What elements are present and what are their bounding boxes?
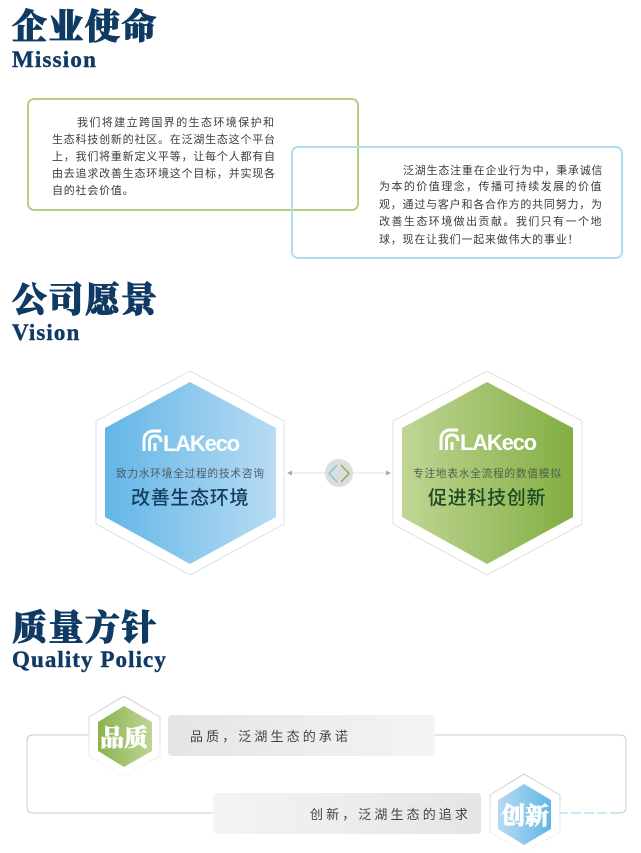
hexagon badge: 品质 (89, 696, 160, 776)
text block: mission: 上，我们将重新定义平等，让每个人都有自 (52, 151, 276, 163)
bar: quality statement (168, 715, 435, 756)
text block: mission (52, 116, 276, 197)
caption: numerical simulation: 专注地表水全流程的数值模拟 (413, 467, 562, 480)
icon: logo mark (441, 430, 458, 450)
title: 公司愿景: 公司愿景 (12, 281, 158, 320)
text block: commitment: 泛湖生态注重在企业行为中，秉承诚信 (403, 165, 603, 177)
panel: mission text green (27, 98, 359, 211)
text block: mission: 由去追求改善生态环境这个目标，并实现各 (52, 168, 276, 180)
text block: commitment: 观，通过与客户和各合作方的共同努力，为 (379, 199, 603, 211)
label: 改善生态环境: 改善生态环境 (131, 487, 249, 509)
panel: mission text blue (291, 146, 623, 259)
logo text: LAKeco: LAKeco (163, 431, 240, 456)
title: 质量方针: 质量方针 (12, 609, 158, 648)
label: 创新: 创新 (501, 802, 549, 830)
text: 创新 statement: 创新，泛湖生态的追求 (310, 807, 471, 822)
subtitle: Vision: Vision (12, 320, 80, 345)
logo text: LAKeco: LAKeco (460, 430, 537, 455)
subtitle: Mission: Mission (12, 47, 97, 72)
text block: mission: 自的社会价值。 (52, 185, 134, 197)
caption: technical consulting: 致力水环境全过程的技术咨询 (116, 467, 265, 480)
text block: mission: 生态科技创新的社区。在泛湖生态这个平台 (52, 134, 276, 146)
title: 企业使命: 企业使命 (12, 8, 158, 47)
text block: mission: 我们将建立跨国界的生态环境保护和 (77, 117, 275, 129)
subtitle: Quality Policy: Quality Policy (12, 647, 167, 672)
icon: center chevrons (325, 459, 353, 487)
label: 品质: 品质 (100, 724, 148, 752)
arrow: left connector (287, 470, 325, 476)
icon: logo mark (144, 431, 161, 451)
connector frame: quality loop (27, 735, 626, 813)
hexagon: right green (393, 371, 582, 575)
text: 品质 statement: 品质，泛湖生态的承诺 (190, 729, 351, 744)
text block: commitment: 为本的价值理念，传播可持续发展的价值 (379, 181, 603, 193)
bar: innovation statement (213, 793, 481, 834)
text block: commitment (379, 164, 603, 246)
text block: commitment: 改善生态环境做出贡献。我们只有一个地 (379, 216, 603, 228)
hexagon: left blue (96, 371, 284, 575)
arrow: right connector (353, 470, 391, 476)
text block: commitment: 球，现在让我们一起来做伟大的事业！ (379, 234, 579, 246)
label: 促进科技创新: 促进科技创新 (428, 487, 546, 509)
hexagon badge: 创新 (490, 774, 560, 852)
